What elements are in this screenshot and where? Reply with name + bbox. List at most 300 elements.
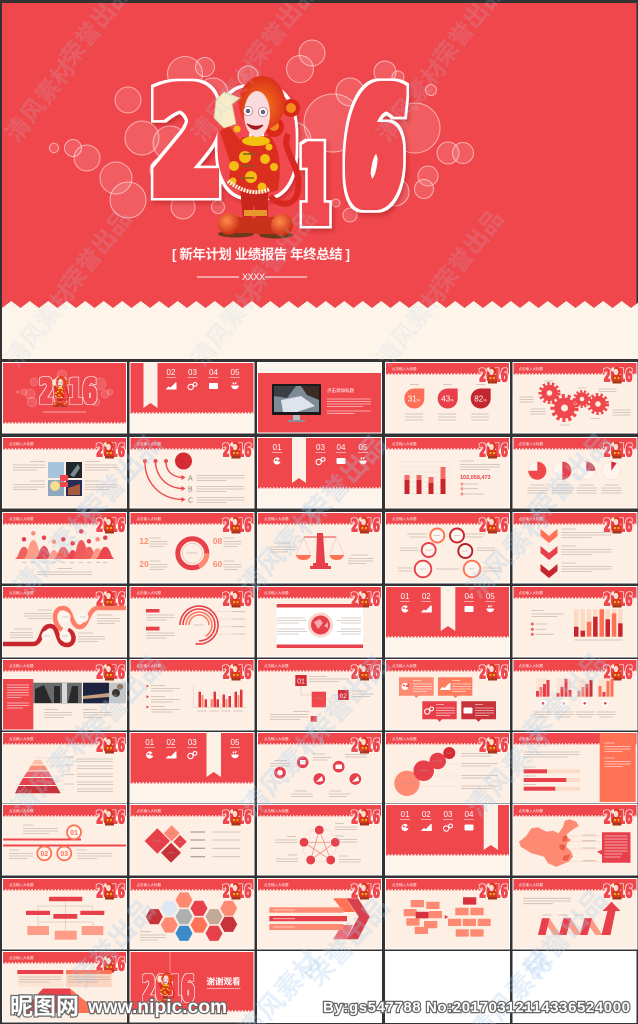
presenter line: XXXX <box>242 272 265 282</box>
slide: percent pies <box>512 437 638 508</box>
logo: 2016 <box>479 662 508 684</box>
slide: hexagons <box>130 878 254 950</box>
logo: 2016 <box>96 954 125 976</box>
watermarks: 清风素材 <box>233 501 328 601</box>
globe <box>308 612 333 638</box>
bullets <box>146 684 149 708</box>
footer url: www.nipic.com <box>87 997 227 1018</box>
watermarks: 荣誉出品 <box>518 647 613 747</box>
text <box>277 618 361 634</box>
slide: mini bar groups <box>512 659 638 730</box>
text <box>275 824 361 862</box>
letters <box>188 476 193 504</box>
text <box>140 932 166 940</box>
text <box>534 712 616 717</box>
slide: gears <box>512 362 638 434</box>
box 02: 02 <box>340 693 347 700</box>
items: 01 <box>401 592 410 601</box>
logo: 2016 <box>479 882 508 902</box>
hills <box>14 540 115 559</box>
chart <box>401 462 451 494</box>
slide: globe panel <box>257 586 382 658</box>
hexagons <box>145 892 238 941</box>
numbers: 12 <box>139 536 149 546</box>
icon glyph dots <box>277 760 359 782</box>
bullets <box>531 622 534 636</box>
text <box>270 676 374 720</box>
empty cell <box>512 951 636 1023</box>
letters: C <box>188 498 193 504</box>
rings <box>415 528 480 577</box>
bar text <box>273 910 295 927</box>
pink boxes <box>27 926 103 940</box>
icons <box>540 700 609 707</box>
logo: 2016 <box>222 440 252 462</box>
monitor <box>272 384 321 422</box>
red side panel <box>3 679 33 730</box>
ribbon <box>206 733 221 777</box>
watermarks: 荣誉出品 <box>66 894 161 994</box>
heading: 点击输入大标题 <box>9 882 34 887</box>
slide: pyramid <box>2 732 127 804</box>
letters: A <box>188 476 193 482</box>
watermarks: 荣誉出品 <box>298 429 393 529</box>
items: 03 <box>188 368 197 377</box>
value: 102,058,473 <box>460 475 491 481</box>
card 4 <box>461 701 496 722</box>
logo: 2016 <box>351 516 380 536</box>
heading: 点击输入大标题 <box>9 736 34 741</box>
leader lines <box>420 753 460 786</box>
watermarks: 清风素材 <box>1 55 81 148</box>
logo: 2016 <box>96 662 125 684</box>
red boxes <box>26 897 104 919</box>
slide: mini cover <box>2 362 127 434</box>
arrows <box>269 898 370 939</box>
ribbon <box>441 587 455 631</box>
card 1 <box>399 677 434 698</box>
slide: numbered rings on lines <box>2 804 127 876</box>
footer id: By:gs547788 No:20170312114336524000 <box>323 999 630 1016</box>
items: 05 <box>486 592 495 601</box>
ribbon <box>292 438 306 483</box>
slide: ribbon agenda 01 03-05 <box>257 437 382 508</box>
text <box>151 686 180 712</box>
diamonds <box>145 825 187 863</box>
logo: 2016 <box>479 516 508 536</box>
ring 01: 01 <box>70 830 78 837</box>
star lines <box>304 830 335 860</box>
hanging line <box>169 952 171 973</box>
items: 04 <box>337 443 346 452</box>
watermarks: 清风素材 <box>372 55 452 148</box>
big year numerals: 2 <box>150 59 223 227</box>
box 01: 01 <box>297 678 305 686</box>
slide: winding road <box>2 586 127 658</box>
items: 01 <box>401 810 410 819</box>
lines <box>3 838 126 846</box>
chevrons <box>540 529 558 578</box>
slide: monitor photo <box>257 362 382 434</box>
big year numerals <box>150 56 414 247</box>
heading: 点击输入大标题 <box>392 663 417 668</box>
circles <box>394 747 455 796</box>
heading: 点击添加标题 <box>327 387 354 394</box>
connectors <box>38 901 93 931</box>
slide: china map <box>512 804 638 876</box>
heading: 点击输入大标题 <box>518 882 543 887</box>
progress bars <box>524 769 580 791</box>
logo: 2016 <box>351 662 380 684</box>
heading: 点击输入大标题 <box>518 441 543 446</box>
watermarks: 荣誉出品 <box>242 205 322 298</box>
tags <box>146 609 160 630</box>
logo: 2016 <box>222 882 252 902</box>
axis and text <box>22 562 107 574</box>
gears <box>540 384 607 420</box>
ribbon <box>484 805 498 850</box>
watermarks: 荣誉出品 <box>301 649 396 749</box>
items: 05 <box>231 738 240 747</box>
slide: mind map <box>385 878 510 950</box>
scale <box>296 533 344 569</box>
logo: 2016 <box>351 590 380 610</box>
text <box>146 612 245 638</box>
heading: 点击输入大标题 <box>264 590 289 595</box>
watermarks: 清风素材 <box>8 502 103 602</box>
watermarks: 清风素材 <box>6 722 101 822</box>
slide: rising arrow <box>512 878 638 950</box>
thanks rule <box>206 988 240 990</box>
monkey <box>157 972 174 1005</box>
watermarks: 清风素材 <box>461 722 556 822</box>
heading: 点击输入大标题 <box>264 516 289 521</box>
big year numerals: 0 <box>217 68 296 223</box>
items: 03 <box>444 810 453 819</box>
text <box>44 710 111 718</box>
text block <box>327 399 371 414</box>
slide: ribbon agenda 01-04 <box>385 804 510 876</box>
slide: rings <box>385 512 510 584</box>
heading: 点击输入大标题 <box>136 516 161 521</box>
slide: ribbon agenda 02-05 <box>130 362 254 434</box>
bubbles decoration <box>49 40 474 222</box>
zigzag <box>538 902 620 935</box>
slide: thanks <box>130 951 254 1022</box>
mini year: 2016 <box>39 372 97 412</box>
card 3 <box>422 701 457 722</box>
logo: 2016 <box>351 882 380 902</box>
big year numerals: 1 <box>303 127 327 247</box>
logo: 2016 <box>479 736 508 756</box>
card 2 <box>438 677 472 698</box>
dark boxes <box>416 897 476 918</box>
text blocks <box>13 462 117 490</box>
thanks text: 谢谢观看 <box>206 976 241 986</box>
map <box>519 819 579 867</box>
watermarks: 清风素材 <box>1 280 81 373</box>
mini bubbles <box>16 370 113 407</box>
heading: 点击输入大标题 <box>518 366 543 371</box>
presenter line <box>197 272 307 282</box>
slide: two columns with stage <box>2 951 127 1022</box>
watermarks: 清风素材 <box>187 55 267 148</box>
mini monkey <box>52 376 69 407</box>
slide: four cards <box>385 659 510 730</box>
watermarks: 荣誉出品 <box>518 884 613 984</box>
white panel <box>277 604 363 648</box>
text <box>401 753 498 788</box>
slide: donut with numbers <box>130 512 254 584</box>
rows <box>190 832 205 857</box>
slide: balance scale <box>257 512 382 584</box>
slide: stepped circles <box>385 732 510 804</box>
text <box>270 751 367 796</box>
connectors <box>301 686 338 699</box>
leader lines <box>560 836 600 862</box>
year: 2016 <box>142 969 194 1010</box>
numbers <box>139 536 222 569</box>
logo: 2016 <box>96 736 125 756</box>
callout <box>597 832 630 863</box>
heading: 点击输入大标题 <box>518 663 543 668</box>
slide: flow boxes <box>257 659 382 730</box>
logo: 2016 <box>222 516 252 536</box>
arrow heads and nodes <box>143 459 186 502</box>
slide: icon network <box>257 732 382 804</box>
text <box>10 610 120 642</box>
column heads <box>17 970 112 987</box>
text <box>532 610 622 640</box>
heading: 点击输入大标题 <box>518 590 543 595</box>
road light <box>55 608 126 630</box>
heading: 点击输入大标题 <box>392 882 417 887</box>
pyramid <box>15 755 61 793</box>
text <box>9 825 112 858</box>
heading: 点击输入大标题 <box>9 590 34 595</box>
leader lines <box>40 758 64 790</box>
footer logo text: 昵图网 <box>10 993 79 1019</box>
slide: tall bars <box>512 586 638 658</box>
items <box>166 368 240 390</box>
axis labels <box>198 710 242 712</box>
watermarks: 荣誉出品 <box>73 429 168 529</box>
logo: 2016 <box>96 882 125 902</box>
heading: 点击输入大标题 <box>136 882 161 887</box>
stage <box>20 988 100 1013</box>
heading: 点击输入大标题 <box>9 663 34 668</box>
slide: org chart <box>2 878 127 950</box>
empty cell <box>257 951 382 1023</box>
items <box>400 592 495 613</box>
text <box>150 538 242 570</box>
items: 05 <box>359 443 368 452</box>
text <box>398 534 501 571</box>
heading: 点击输入大标题 <box>264 882 289 887</box>
slide: chevron arrows <box>257 878 382 950</box>
icon circles <box>274 756 362 785</box>
cream footer with zigzag edge <box>2 301 638 359</box>
photos <box>33 683 126 703</box>
slide: bullets and grouped bars <box>130 659 254 730</box>
text <box>270 543 373 564</box>
empty cell <box>385 951 510 1023</box>
captions <box>528 485 622 493</box>
slide: curved arrows ABC <box>130 437 254 508</box>
ring 02: 02 <box>40 851 48 858</box>
subtitle: [ 新年计划 业绩报告 年终总结 ] <box>172 246 350 262</box>
bullets <box>460 482 464 496</box>
heading: 点击输入大标题 <box>264 736 289 741</box>
heading: 点击输入大标题 <box>392 736 417 741</box>
slide: side panel bars <box>512 732 638 804</box>
items <box>272 443 368 465</box>
heading: 点击输入大标题 <box>264 663 289 668</box>
nodes <box>299 825 340 865</box>
watermarks: 荣誉出品 <box>57 205 137 298</box>
items: 02 <box>422 810 431 819</box>
watermarks: 荣誉出品 <box>429 205 509 298</box>
logo: 2016 <box>96 590 125 610</box>
small box <box>311 716 317 722</box>
watermarks: 清风素材 <box>372 280 452 373</box>
ribbon <box>144 363 158 408</box>
labels <box>582 835 596 861</box>
text <box>19 977 110 982</box>
items: 02 <box>167 368 176 377</box>
logo: 2016 <box>479 366 508 386</box>
items: 02 <box>167 738 176 747</box>
text <box>196 476 244 502</box>
heading: 点击输入大标题 <box>392 366 417 371</box>
logo: 2016 <box>222 590 252 610</box>
monkey mascot <box>214 76 300 238</box>
drop 43: 43% <box>441 394 454 404</box>
heading: 点击输入大标题 <box>9 955 34 960</box>
items <box>145 738 240 759</box>
heading: 点击输入大标题 <box>136 663 161 668</box>
donut <box>178 539 207 568</box>
items: 05 <box>231 368 240 377</box>
pies <box>528 462 620 480</box>
icon dots <box>542 702 607 705</box>
items: 01 <box>273 443 282 452</box>
numbers: 20 <box>139 559 149 569</box>
items: 02 <box>422 592 431 601</box>
slide: concentric arcs <box>130 586 254 658</box>
ring 03: 03 <box>60 851 68 858</box>
watermarks: 清风素材 <box>236 722 331 822</box>
side panel <box>600 733 636 802</box>
slide: four photos <box>2 437 127 508</box>
items: 03 <box>316 443 325 452</box>
logo: 2016 <box>222 662 252 684</box>
slide: photo strip <box>2 659 127 730</box>
drop 82: 82% <box>474 394 487 404</box>
year nodes <box>42 612 88 642</box>
grouped bars <box>192 685 248 707</box>
heading: 点击输入大标题 <box>518 516 543 521</box>
items: 04 <box>209 368 218 377</box>
items <box>400 810 474 831</box>
slide: percentage drops <box>385 362 510 434</box>
photos <box>48 462 82 496</box>
panel: hero slide <box>2 3 638 359</box>
items: 03 <box>188 738 197 747</box>
heading: 点击输入大标题 <box>264 808 289 813</box>
heading: 点击输入大标题 <box>518 736 543 741</box>
slide: stacked bar chart <box>385 437 510 508</box>
heading: 点击输入大标题 <box>136 441 161 446</box>
title circle <box>175 452 192 470</box>
watermarks: 荣誉出品 <box>301 892 396 992</box>
text <box>562 529 612 572</box>
items: 01 <box>145 738 155 747</box>
arcs <box>180 606 218 644</box>
heading: 点击输入大标题 <box>136 808 161 813</box>
slide: ribbon agenda 01 02 04 05 <box>385 586 510 658</box>
logo: 2016 <box>351 736 380 756</box>
slide: hills chart <box>2 512 127 584</box>
heading: 点击输入大标题 <box>9 516 34 521</box>
captions <box>405 384 489 420</box>
road dark <box>3 626 74 645</box>
logo: 2016 <box>96 440 125 462</box>
slide: star network <box>257 804 382 876</box>
arrows <box>145 461 182 500</box>
text <box>460 461 500 494</box>
letters: B <box>188 486 193 494</box>
ring <box>302 828 336 862</box>
heading: 点击输入大标题 <box>392 516 417 521</box>
text <box>65 757 113 792</box>
heading: 点击输入大标题 <box>392 441 417 446</box>
watermarks: 荣誉出品 <box>523 427 618 527</box>
text <box>154 832 240 857</box>
heading: 点击输入大标题 <box>9 808 34 813</box>
arrow <box>445 915 448 919</box>
pale boxes <box>404 900 491 937</box>
slide: ribbon agenda 01-03 05 <box>130 732 254 804</box>
labels <box>523 898 584 915</box>
mini subtitle <box>43 411 86 413</box>
heading: 点击输入大标题 <box>9 441 34 446</box>
slide: chevrons <box>512 512 638 584</box>
big year numerals: 6 <box>336 56 414 240</box>
logo: 2016 <box>479 440 508 462</box>
labels <box>520 381 630 425</box>
logo: 2016 <box>96 808 125 828</box>
drop 31: 31% <box>408 394 421 404</box>
slide: diamonds <box>130 804 254 876</box>
numbers: 60 <box>213 559 222 569</box>
items: 04 <box>465 592 474 601</box>
pins <box>22 529 108 546</box>
watermarks: 清风素材 <box>187 280 267 373</box>
numbers: 08 <box>213 536 222 546</box>
text <box>524 752 580 784</box>
bars <box>574 609 623 637</box>
logo: 2016 <box>351 808 380 828</box>
items: 04 <box>465 810 474 819</box>
watermarks: 清风素材 <box>461 504 556 604</box>
bar groups <box>536 678 614 697</box>
heading: 点击输入大标题 <box>136 590 161 595</box>
logo: 2016 <box>222 808 252 828</box>
watermarks: 荣誉出品 <box>76 649 171 749</box>
logo: 2016 <box>96 516 125 536</box>
heading: 点击输入大标题 <box>518 808 543 813</box>
